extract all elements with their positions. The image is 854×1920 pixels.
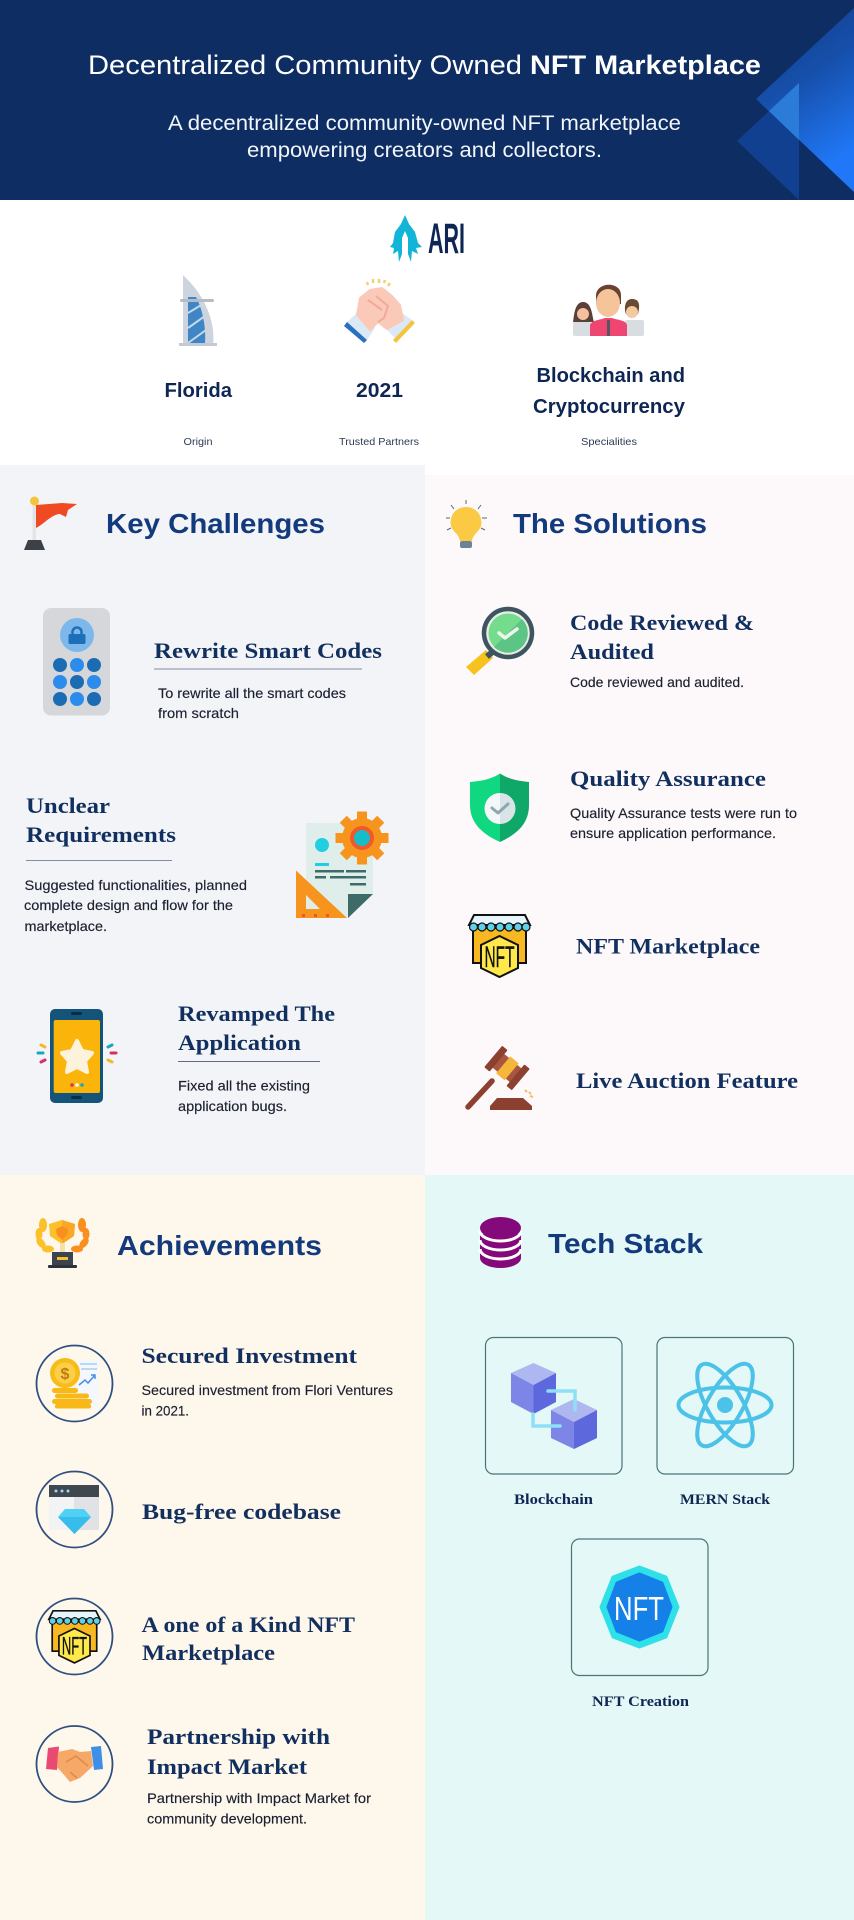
item: secured investment xyxy=(142,1343,393,1418)
icon: NFT shop: NFT xyxy=(484,941,514,974)
icon: phone with star xyxy=(38,1009,116,1103)
panel: key challenges xyxy=(0,465,425,1176)
item: code reviewed and audited: Code reviewed and audited. xyxy=(570,675,744,690)
icon badge: NFT shop xyxy=(36,1598,112,1674)
stat: origin: Origin xyxy=(184,436,213,448)
icon: tower xyxy=(179,275,217,346)
item: rewrite smart codes: from scratch xyxy=(158,706,239,721)
icon: flag xyxy=(24,496,77,550)
stat: specialities: Cryptocurrency xyxy=(533,395,686,418)
card: NFT creation: NFT Creation xyxy=(592,1694,690,1710)
panel: company overview xyxy=(164,215,686,448)
icon: light bulb xyxy=(446,500,487,548)
icon badge: coins and chart xyxy=(36,1346,112,1422)
card: NFT creation xyxy=(572,1539,708,1710)
item: unclear requirements xyxy=(24,793,247,934)
item: unclear requirements: Requirements xyxy=(26,822,176,847)
icon: magnifier with check xyxy=(466,609,532,675)
panel: the solutions xyxy=(425,475,854,1176)
title: NFT Marketplace xyxy=(530,50,761,80)
item: secured investment: Secured Investment xyxy=(142,1343,358,1368)
item: partnership with impact market xyxy=(147,1724,371,1826)
title xyxy=(88,50,761,80)
panel: company overview: ARI xyxy=(428,215,465,263)
item: live auction feature: Live Auction Feature xyxy=(576,1068,798,1093)
item: rewrite smart codes xyxy=(154,638,382,721)
heading: achievements: Achievements xyxy=(117,1230,322,1261)
stat: trusted partners: 2021 xyxy=(356,379,403,402)
item: quality assurance: Quality Assurance xyxy=(570,766,766,791)
stat: trusted partners xyxy=(339,379,419,448)
item: unclear requirements: complete design and flow for the xyxy=(24,898,233,913)
heading: tech stack: Tech Stack xyxy=(548,1228,704,1259)
item: NFT marketplace: NFT Marketplace xyxy=(576,934,760,958)
icon: keypad lock xyxy=(43,608,110,716)
item: secured investment: Secured investment from Flori Ventures xyxy=(142,1383,393,1398)
panel: tech stack xyxy=(425,1175,854,1920)
item: code reviewed and audited: Code Reviewed & xyxy=(570,610,754,635)
panel: achievements xyxy=(0,1175,425,1920)
card: blockchain: Blockchain xyxy=(514,1492,594,1508)
subtitle xyxy=(168,112,681,162)
item: quality assurance xyxy=(570,766,797,841)
item: secured investment: in 2021. xyxy=(142,1404,189,1418)
item: code reviewed and audited: Audited xyxy=(570,639,655,664)
icon: clasped hands xyxy=(344,279,415,343)
item: revamped the application: Application xyxy=(178,1030,302,1055)
card: MERN stack xyxy=(657,1338,794,1508)
card: MERN stack: MERN Stack xyxy=(680,1492,771,1508)
stat: origin: Florida xyxy=(164,379,233,402)
stat: origin xyxy=(164,379,233,448)
heading: key challenges: Key Challenges xyxy=(106,508,325,539)
icon badge: coins and chart: $ xyxy=(60,1366,70,1383)
icon: trophy xyxy=(34,1218,91,1268)
item: code reviewed and audited xyxy=(570,610,754,690)
item: one of a kind marketplace xyxy=(142,1612,355,1665)
icon: NFT shop xyxy=(469,915,530,977)
stat: trusted partners: Trusted Partners xyxy=(339,436,419,448)
item: one of a kind marketplace: Marketplace xyxy=(142,1640,275,1665)
item: rewrite smart codes: To rewrite all the smart codes xyxy=(158,686,346,701)
icon: people group xyxy=(573,285,644,336)
item: quality assurance: ensure application performance. xyxy=(570,826,776,841)
heading: the solutions: The Solutions xyxy=(513,508,707,539)
icon: document with gear and ruler xyxy=(296,812,388,918)
logo: ARI xyxy=(390,215,465,263)
icon: shield with check xyxy=(470,774,529,842)
panel: header banner xyxy=(0,0,854,200)
item: revamped the application: Fixed all the existing xyxy=(178,1078,310,1094)
item: bug-free codebase: Bug-free codebase xyxy=(142,1499,341,1524)
item: unclear requirements: marketplace. xyxy=(24,919,107,934)
item: partnership with impact market: Partnership with Impact Market for xyxy=(147,1791,371,1806)
stat: specialities: Blockchain and xyxy=(536,364,685,387)
card: blockchain xyxy=(486,1338,622,1508)
item: quality assurance: Quality Assurance tests were run to xyxy=(570,806,797,821)
stat: specialities: Specialities xyxy=(581,436,637,448)
item: revamped the application: Revamped The xyxy=(178,1001,335,1026)
item: partnership with impact market: Partnership with xyxy=(147,1724,331,1749)
icon badge: diamond window xyxy=(36,1472,112,1548)
item: one of a kind marketplace: A one of a Kind NFT xyxy=(142,1612,355,1637)
item: rewrite smart codes: Rewrite Smart Codes xyxy=(154,638,382,663)
icon: gavel xyxy=(468,1046,533,1110)
icon badge: NFT shop: NFT xyxy=(62,1633,87,1661)
item: revamped the application xyxy=(178,1001,335,1114)
item: unclear requirements: Unclear xyxy=(26,793,110,818)
decorative header triangles xyxy=(737,8,854,200)
item: partnership with impact market: community development. xyxy=(147,1812,307,1826)
subtitle: empowering creators and collectors. xyxy=(247,139,602,162)
icon: database xyxy=(480,1217,521,1268)
stat: specialities xyxy=(533,364,686,448)
item: revamped the application: application bugs. xyxy=(178,1099,287,1114)
subtitle: A decentralized community-owned NFT marketplace xyxy=(168,112,681,135)
title: Decentralized Community Owned xyxy=(88,50,522,80)
icon badge: handshake xyxy=(36,1726,112,1802)
card: NFT creation: NFT xyxy=(614,1590,664,1627)
item: unclear requirements: Suggested functionalities, planned xyxy=(24,878,247,893)
item: partnership with impact market: Impact Market xyxy=(147,1754,308,1779)
